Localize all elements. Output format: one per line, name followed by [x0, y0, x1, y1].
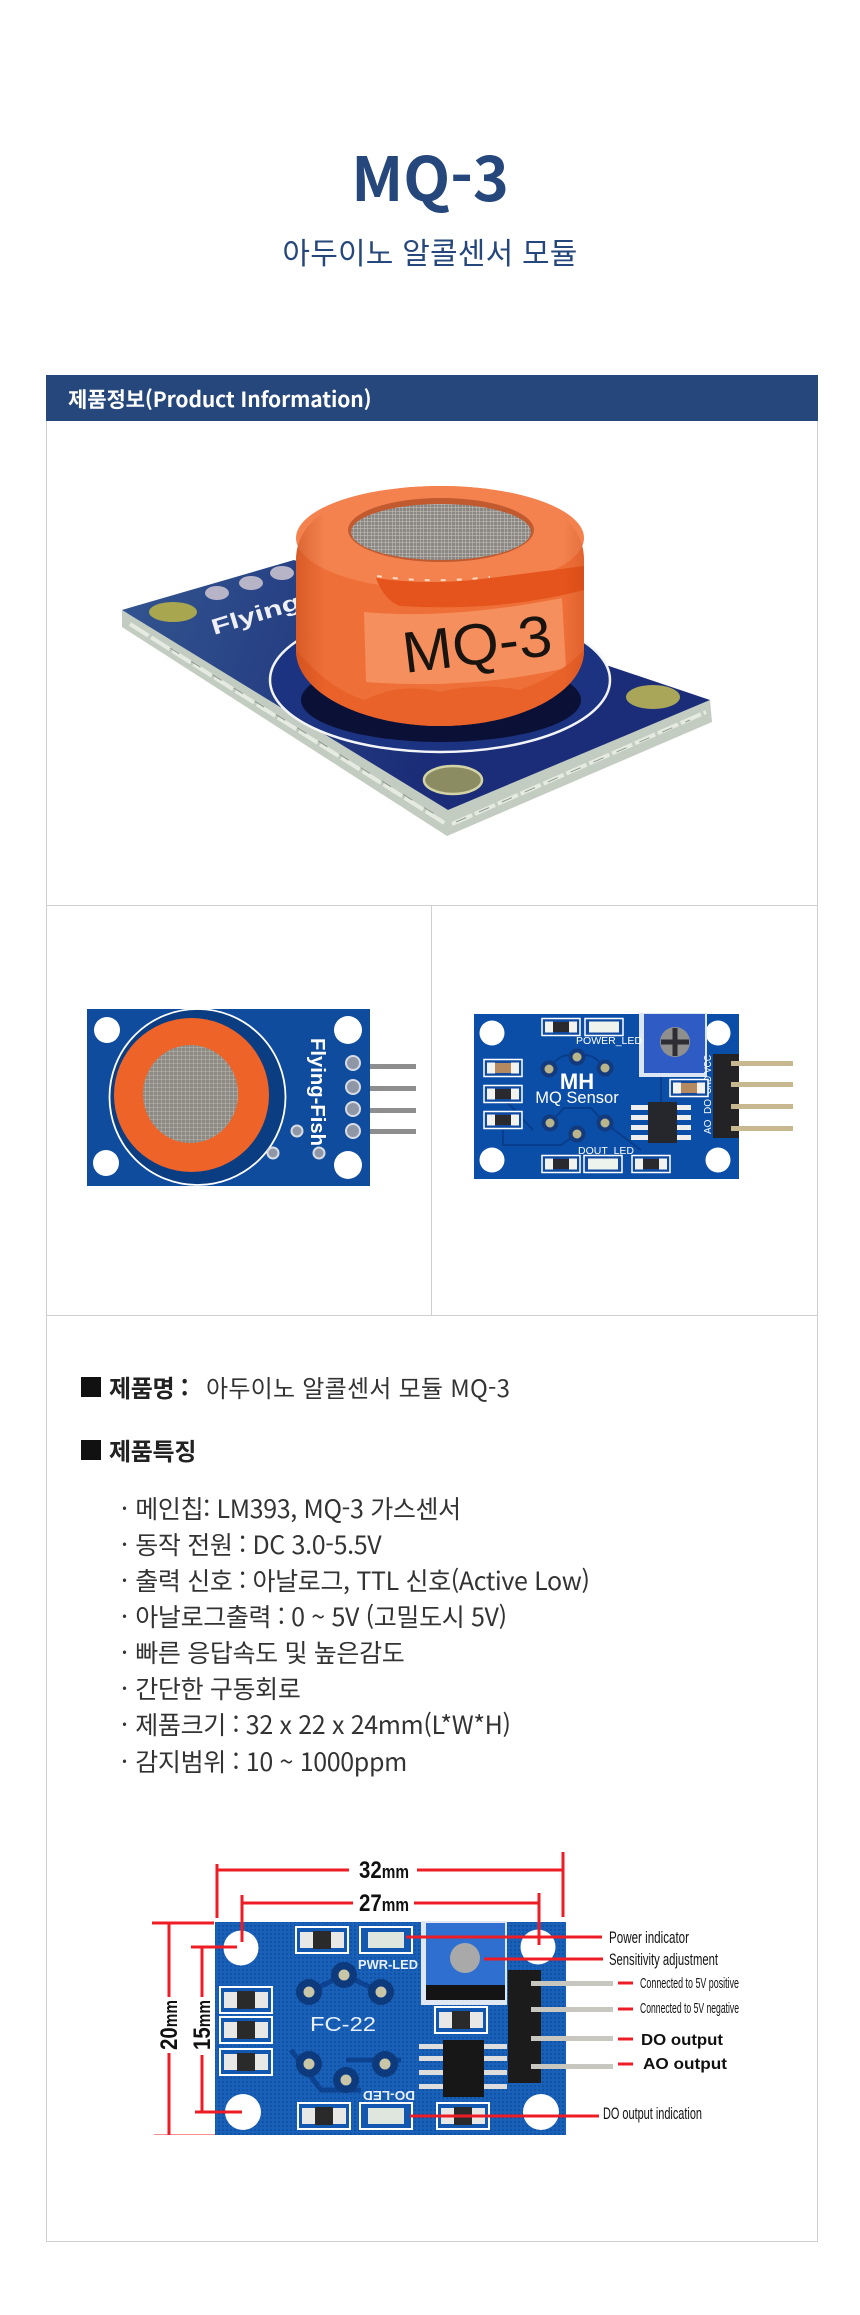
feature: output signal: · 출력 신호 : 아날로그, TTL 신호(Active Low) — [121, 1562, 590, 1598]
square bullet — [81, 1377, 101, 1397]
dimension labels: 27mm — [359, 1890, 409, 1917]
row divider: below main photo — [47, 905, 817, 906]
callout labels: AO output — [643, 2056, 728, 2073]
through-hole pads — [540, 1060, 558, 1078]
callout lines — [406, 1937, 633, 2116]
SMD parts — [542, 1018, 580, 1036]
holes — [94, 1017, 120, 1043]
text block: features heading — [81, 1432, 196, 1467]
pin labels — [703, 1055, 714, 1134]
mounting holes — [149, 602, 197, 622]
feature: drive circuit: · 간단한 구동회로 — [121, 1670, 300, 1706]
board marking: Flying — [208, 589, 303, 640]
pin header — [508, 1970, 613, 2083]
board — [215, 1922, 566, 2138]
potentiometer — [421, 1921, 507, 2005]
silkscreen text: FC-22 — [310, 2014, 376, 2036]
mounting holes — [224, 1930, 258, 1966]
mounting holes — [480, 1020, 504, 1046]
dimension lines — [152, 1852, 563, 2136]
dimension labels: 20mm — [156, 2000, 183, 2050]
pin labels: AO — [703, 1119, 714, 1134]
feature: size: · 제품크기 : 32 x 22 x 24mm(L*W*H) — [121, 1706, 511, 1742]
mesh cap — [348, 498, 534, 562]
silkscreen text — [535, 1035, 642, 1157]
section header bar — [46, 375, 818, 421]
feature list — [121, 1490, 590, 1779]
square bullet — [81, 1440, 101, 1460]
feature: response: · 빠른 응답속도 및 높은감도 — [121, 1634, 404, 1670]
front board photo — [87, 1009, 416, 1186]
panel: product information — [46, 375, 818, 2242]
orange ring — [114, 1018, 269, 1172]
product name label: 제품명 : — [109, 1369, 188, 1404]
feature: main chip: · 메인칩: LM393, MQ-3 가스센서 — [121, 1490, 461, 1526]
callout labels — [603, 1928, 739, 2123]
pin labels: DO — [703, 1099, 714, 1114]
traces — [503, 1055, 661, 1150]
header pin pads — [205, 586, 229, 600]
silkscreen text: POWER_LED — [576, 1035, 642, 1047]
column divider between board photos — [431, 905, 432, 1315]
pin pads — [268, 1056, 360, 1158]
title: MQ-3 — [351, 130, 509, 219]
section header bar: 제품정보(Product Information) — [68, 384, 372, 414]
board edge — [122, 610, 712, 836]
feature: range: · 감지범위 : 10 ~ 1000ppm — [121, 1743, 407, 1779]
brand text: Flying-Fish — [306, 1038, 328, 1146]
IC chip — [631, 1102, 691, 1143]
back board photo — [474, 1013, 793, 1179]
silkscreen ring — [110, 1009, 286, 1185]
callout labels: DO output indication — [603, 2104, 702, 2123]
row divider: below board photos — [47, 1315, 817, 1316]
dimension labels: 32mm — [359, 1857, 409, 1884]
feature: analog output: · 아날로그출력 : 0 ~ 5V (고밀도시 5V) — [121, 1598, 507, 1634]
product name value: 아두이노 알콜센서 모듈 MQ-3 — [206, 1369, 510, 1404]
silkscreen text — [310, 1957, 418, 2103]
subtitle: 아두이노 알콜센서 모듈 — [282, 229, 578, 273]
IC chip — [419, 2040, 507, 2097]
silkscreen text: PWR-LED — [358, 1957, 418, 1972]
sticker label: MQ-3 — [399, 603, 555, 686]
header pins — [370, 1064, 416, 1134]
white silkscreen ring — [270, 608, 610, 752]
shadow under sensor — [301, 658, 581, 742]
silkscreen text: DO-LED — [363, 2088, 415, 2103]
dimension diagram — [152, 1852, 739, 2135]
callout labels: DO output — [641, 2032, 724, 2049]
orange sensor cylinder — [296, 486, 584, 726]
text block: product name — [81, 1369, 510, 1404]
pin header — [713, 1054, 739, 1138]
pin labels: GND — [703, 1076, 714, 1094]
dimension labels: 15mm — [189, 2000, 216, 2050]
main product photo: MQ-3 sensor module — [122, 486, 712, 836]
through-hole pads — [296, 1979, 322, 2005]
dimension labels — [156, 1857, 409, 2050]
feature: power: · 동작 전원 : DC 3.0-5.5V — [121, 1526, 381, 1562]
pin labels: VCC — [703, 1055, 714, 1073]
features label: 제품특징 — [109, 1432, 196, 1467]
silkscreen text: MH — [560, 1069, 594, 1094]
silkscreen text: DOUT_LED — [578, 1145, 634, 1157]
potentiometer — [639, 1013, 707, 1077]
silkscreen text: MQ Sensor — [535, 1089, 619, 1107]
board — [87, 1009, 370, 1186]
SMD parts — [296, 1927, 348, 1953]
traces — [291, 1975, 401, 2090]
board face — [122, 560, 710, 810]
callout labels: Power indicator — [609, 1928, 689, 1947]
mesh — [143, 1045, 238, 1143]
board — [474, 1014, 739, 1179]
